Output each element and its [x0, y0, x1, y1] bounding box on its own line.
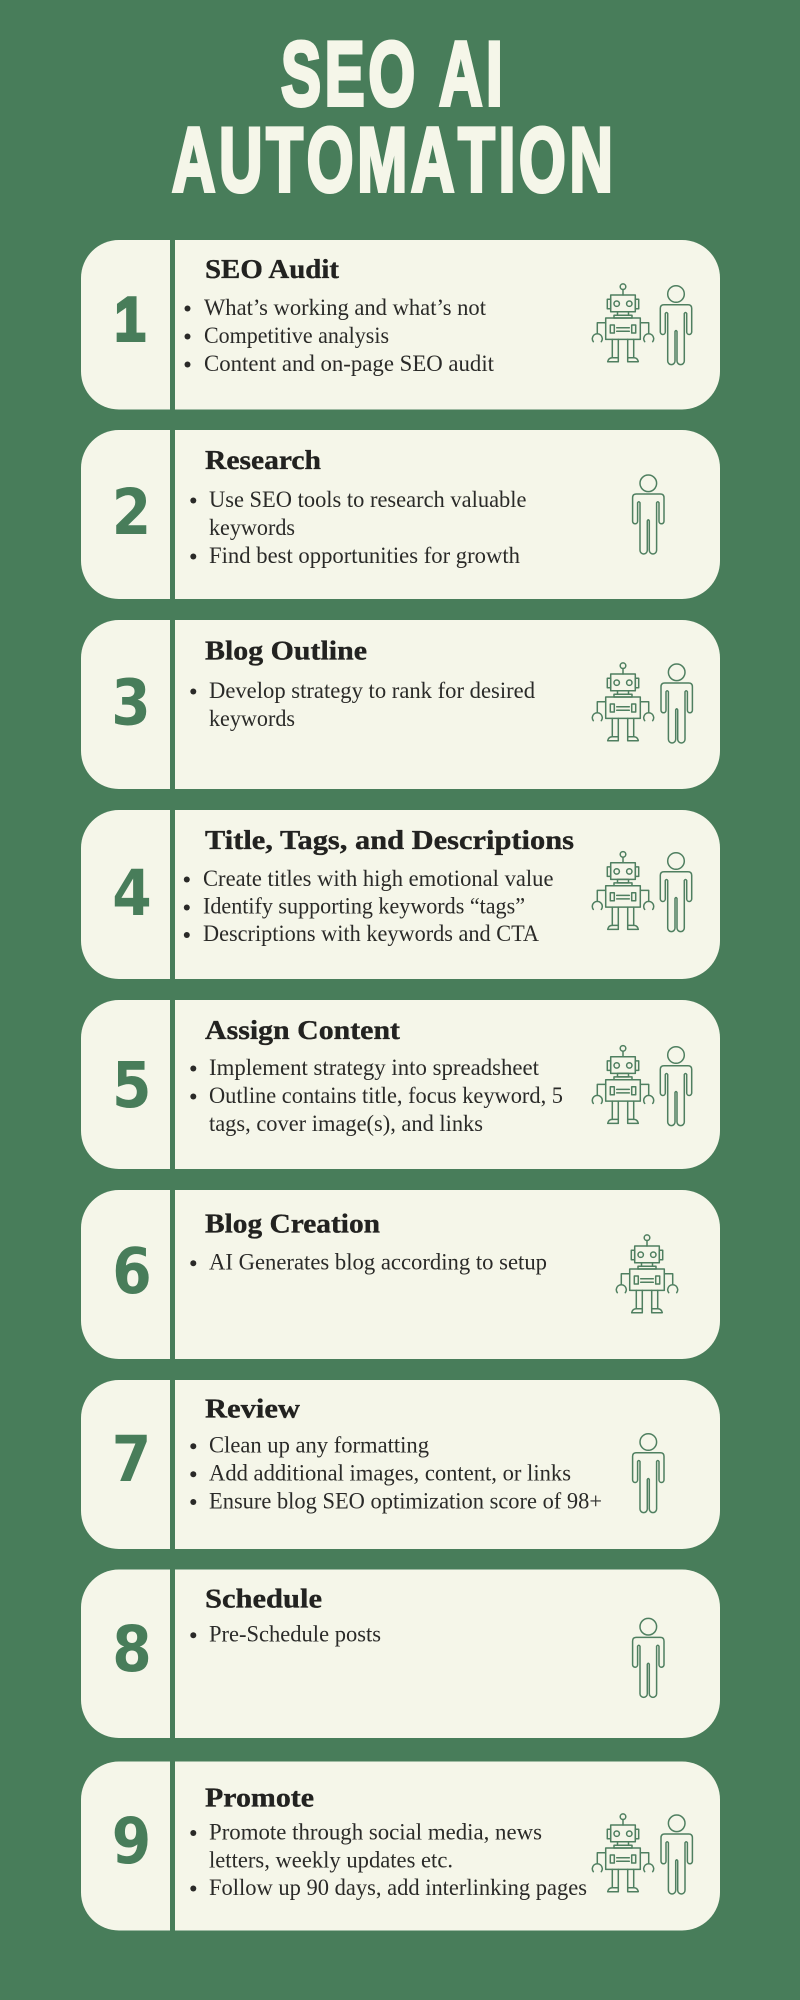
panel: step 7 Review	[81, 1380, 720, 1549]
heading: Research	[205, 445, 321, 475]
bullet list	[190, 1819, 587, 1900]
icon: person	[660, 853, 692, 932]
bullet list: keywords	[209, 515, 295, 540]
icon: person	[661, 1815, 692, 1894]
bullet list: Content and on-page SEO audit	[204, 351, 495, 376]
panel: step 8 Schedule	[81, 1570, 720, 1738]
title: SEO AI	[281, 24, 503, 125]
bullet list: Identify supporting keywords “tags”	[203, 894, 525, 918]
bullet list: Descriptions with keywords and CTA	[203, 921, 539, 946]
heading: Blog Creation	[205, 1208, 380, 1238]
panel: step 1 SEO Audit	[81, 240, 720, 410]
bullet list: tags, cover image(s), and links	[209, 1111, 483, 1136]
number 4: 4	[112, 857, 152, 931]
panel: step 2 Research	[81, 430, 720, 599]
bullet list: Develop strategy to rank for desired	[209, 678, 535, 703]
bullet list: Clean up any formatting	[209, 1433, 429, 1458]
heading: Promote	[205, 1783, 314, 1813]
icon: robot	[592, 284, 654, 362]
panel: step 3 Blog Outline	[81, 620, 720, 789]
icon: person	[660, 286, 692, 365]
bullet list: Add additional images, content, or links	[209, 1461, 571, 1486]
heading: Blog Outline	[205, 635, 367, 665]
number 1: 1	[114, 286, 146, 354]
icon: robot	[592, 852, 654, 929]
number 5: 5	[112, 1049, 151, 1123]
bullet list: Use SEO tools to research valuable	[209, 487, 526, 512]
panel: step 6 Blog Creation	[81, 1190, 720, 1359]
icon: robot	[616, 1235, 678, 1313]
icon: person	[633, 1434, 664, 1513]
bullet list	[190, 678, 535, 731]
bullet list	[184, 866, 554, 946]
bullet list: keywords	[209, 706, 295, 731]
bullet list	[184, 295, 495, 376]
bullet list: Create titles with high emotional value	[203, 866, 554, 891]
number 2: 2	[112, 476, 151, 550]
title: AUTOMATION	[172, 110, 613, 211]
icon: robot	[592, 1046, 654, 1123]
icon: person	[661, 664, 692, 743]
number 6: 6	[112, 1235, 152, 1309]
number 8: 8	[112, 1613, 152, 1687]
icon: person	[660, 1047, 692, 1126]
icon: robot	[592, 663, 654, 741]
title	[172, 24, 613, 211]
bullet list: Competitive analysis	[204, 323, 389, 348]
bullet list	[190, 1055, 563, 1136]
heading: Review	[205, 1394, 301, 1424]
icon: robot	[592, 1814, 654, 1892]
bullet list	[190, 487, 527, 568]
bullet list: Pre-Schedule posts	[209, 1622, 381, 1647]
panel: step 5 Assign Content	[81, 1000, 720, 1169]
heading: Schedule	[205, 1584, 322, 1614]
bullet list: Outline contains title, focus keyword, 5	[209, 1083, 563, 1108]
panel: step 4 Title, Tags, and Descriptions	[81, 810, 720, 979]
bullet list: Implement strategy into spreadsheet	[209, 1055, 540, 1080]
number 3: 3	[111, 667, 151, 740]
heading: SEO Audit	[205, 254, 339, 284]
number 7: 7	[112, 1423, 151, 1497]
bullet list: Follow up 90 days, add interlinking pages	[209, 1875, 587, 1900]
bullet list: letters, weekly updates etc.	[209, 1847, 453, 1872]
panel: step 9 Promote	[81, 1762, 720, 1930]
bullet list: AI Generates blog according to setup	[209, 1250, 547, 1275]
heading: Assign Content	[205, 1015, 400, 1045]
bullet list: Find best opportunities for growth	[209, 543, 520, 568]
heading: Title, Tags, and Descriptions	[205, 825, 574, 855]
bullet list: Promote through social media, news	[209, 1819, 542, 1844]
bullet list: What’s working and what’s not	[204, 295, 487, 320]
icon: person	[633, 475, 664, 554]
bullet list	[190, 1433, 602, 1513]
number 9: 9	[112, 1805, 151, 1879]
bullet list: Ensure blog SEO optimization score of 98+	[209, 1488, 602, 1513]
icon: person	[633, 1618, 664, 1697]
